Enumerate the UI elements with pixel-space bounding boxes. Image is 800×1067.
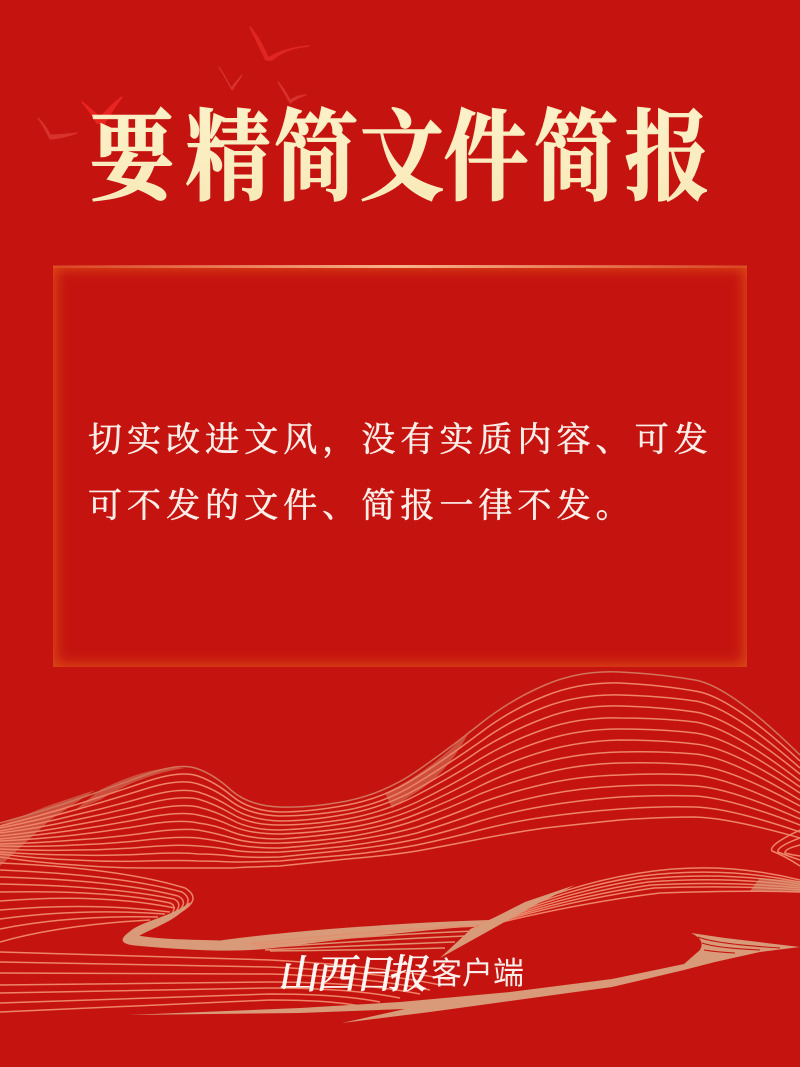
panel: message box — [53, 266, 747, 667]
wave: fan under logo — [250, 926, 480, 951]
wave: mountain bundle — [0, 672, 800, 868]
icon: bird 3 — [278, 82, 306, 103]
wave: right rising bundle — [440, 868, 800, 958]
icon: bird 4 — [82, 97, 122, 124]
body text line 2: 可不发的文件、简报一律不发。 — [88, 488, 635, 525]
logo: client label: 客户端 — [431, 956, 524, 991]
wave: mountain pinch highlights — [0, 730, 470, 866]
wave: bottom left lines — [0, 952, 450, 1012]
wave: right edge hook — [772, 830, 800, 866]
wave: ribbon tip lines — [698, 937, 780, 953]
body text line 1: 切实改进文风，没有实质内容、可发 — [88, 422, 713, 459]
wave: hook ribbon — [123, 903, 510, 950]
wave decoration — [0, 672, 800, 1023]
wave: bottom ribbon — [128, 933, 800, 1023]
logo: newspaper name: 山西日报 — [276, 942, 436, 1000]
wave: left bundle — [0, 863, 193, 942]
icon: bird 5 — [38, 118, 77, 139]
title: 要精简文件简报 — [89, 79, 710, 220]
icon: bird 2 — [219, 67, 242, 90]
icon: bird 1 — [250, 27, 309, 60]
birds — [38, 27, 309, 139]
